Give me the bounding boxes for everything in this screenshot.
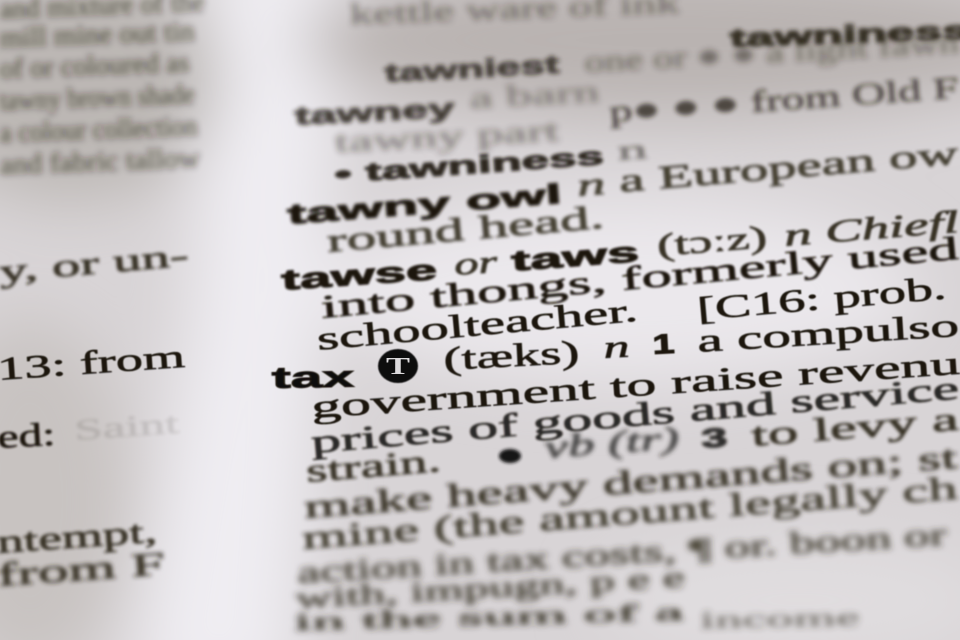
top text lines, out of focus: a barn [469,75,600,115]
entry: tawse [280,203,960,358]
entry: tawse: n Chiefl [783,203,960,253]
left column: blurred upper text: and fabric tallow [0,143,201,181]
definition lines below tax: in the sum of a [293,600,685,636]
top text lines, out of focus: n [616,134,649,166]
entry: tawse: into thongs, formerly used [319,231,960,326]
definition lines below tax: vb (tr) [543,419,680,465]
bullet [499,449,521,463]
entry: tawny owl: round head. [326,200,606,260]
icon: circled T: T [386,354,410,380]
entry: tax headword: 1 [652,328,675,360]
definition lines below tax: 3 [700,422,728,454]
entry: tawse: [C16: prob. [696,271,948,328]
top text lines, out of focus: p● ● ● from Old F [608,70,960,129]
top text lines, out of focus: tawney [294,95,455,131]
top text lines, out of focus: • tawniness [333,142,605,189]
top text lines, out of focus: tawny part [334,114,561,159]
top text lines, out of focus: tawniness [729,17,960,53]
entry: tawse: (tɔːz) [656,218,768,263]
entry: tax headword: n [602,328,630,365]
entry: tax headword [272,308,960,395]
top text lines, out of focus: one or ● ● a light fawn [584,26,960,79]
definition lines below tax: income [700,605,860,634]
entry: tawse: schoolteacher. [315,293,639,358]
entry: tawny owl: n [576,165,606,203]
entry: tawny owl [286,136,960,260]
entry: tawse: tawse [280,254,438,297]
top text lines, out of focus: tawniest [384,51,561,88]
entry: tax headword: a compulso [696,308,960,360]
definition lines below tax: strain. [305,443,442,490]
definition lines below tax: action in tax costs, ¶ or. boon or [296,516,948,590]
definition lines below tax: prices of goods and service [310,371,960,461]
definition lines below tax: make heavy demands on; st [303,440,959,526]
entry: tawny owl: tawny owl [286,178,563,230]
entry: tawse: or [453,243,499,282]
entry: tawny owl: a European ow [618,136,960,200]
definition lines below tax: to levy a [750,402,960,454]
entry: tawse: taws [510,236,640,278]
left column: sharper text fragments: Saint [73,407,181,447]
definition lines below tax [293,346,960,636]
definition lines below tax: government to raise revenu [310,346,960,426]
definition lines below tax: with, impugn, p e e [295,561,686,615]
left column: sharper text fragments [0,237,190,594]
left column: blurred upper text [0,0,205,181]
left column: blurred upper text: a colour collection [0,111,198,149]
left column: blurred upper text: tawny brown shade [0,79,195,117]
left column: blurred upper text: of or coloured as [0,47,190,85]
left column: blurred upper text: mill mine out tin [0,16,195,54]
icon: circled T [378,349,418,383]
entry: tax headword: tax [272,361,355,395]
top text lines, out of focus [294,0,960,189]
definition lines below tax: mine (the amount legally ch [301,471,960,557]
left column: sharper text fragments: y, or un- [0,237,190,289]
entry: tax headword: (tæks) [443,335,580,378]
